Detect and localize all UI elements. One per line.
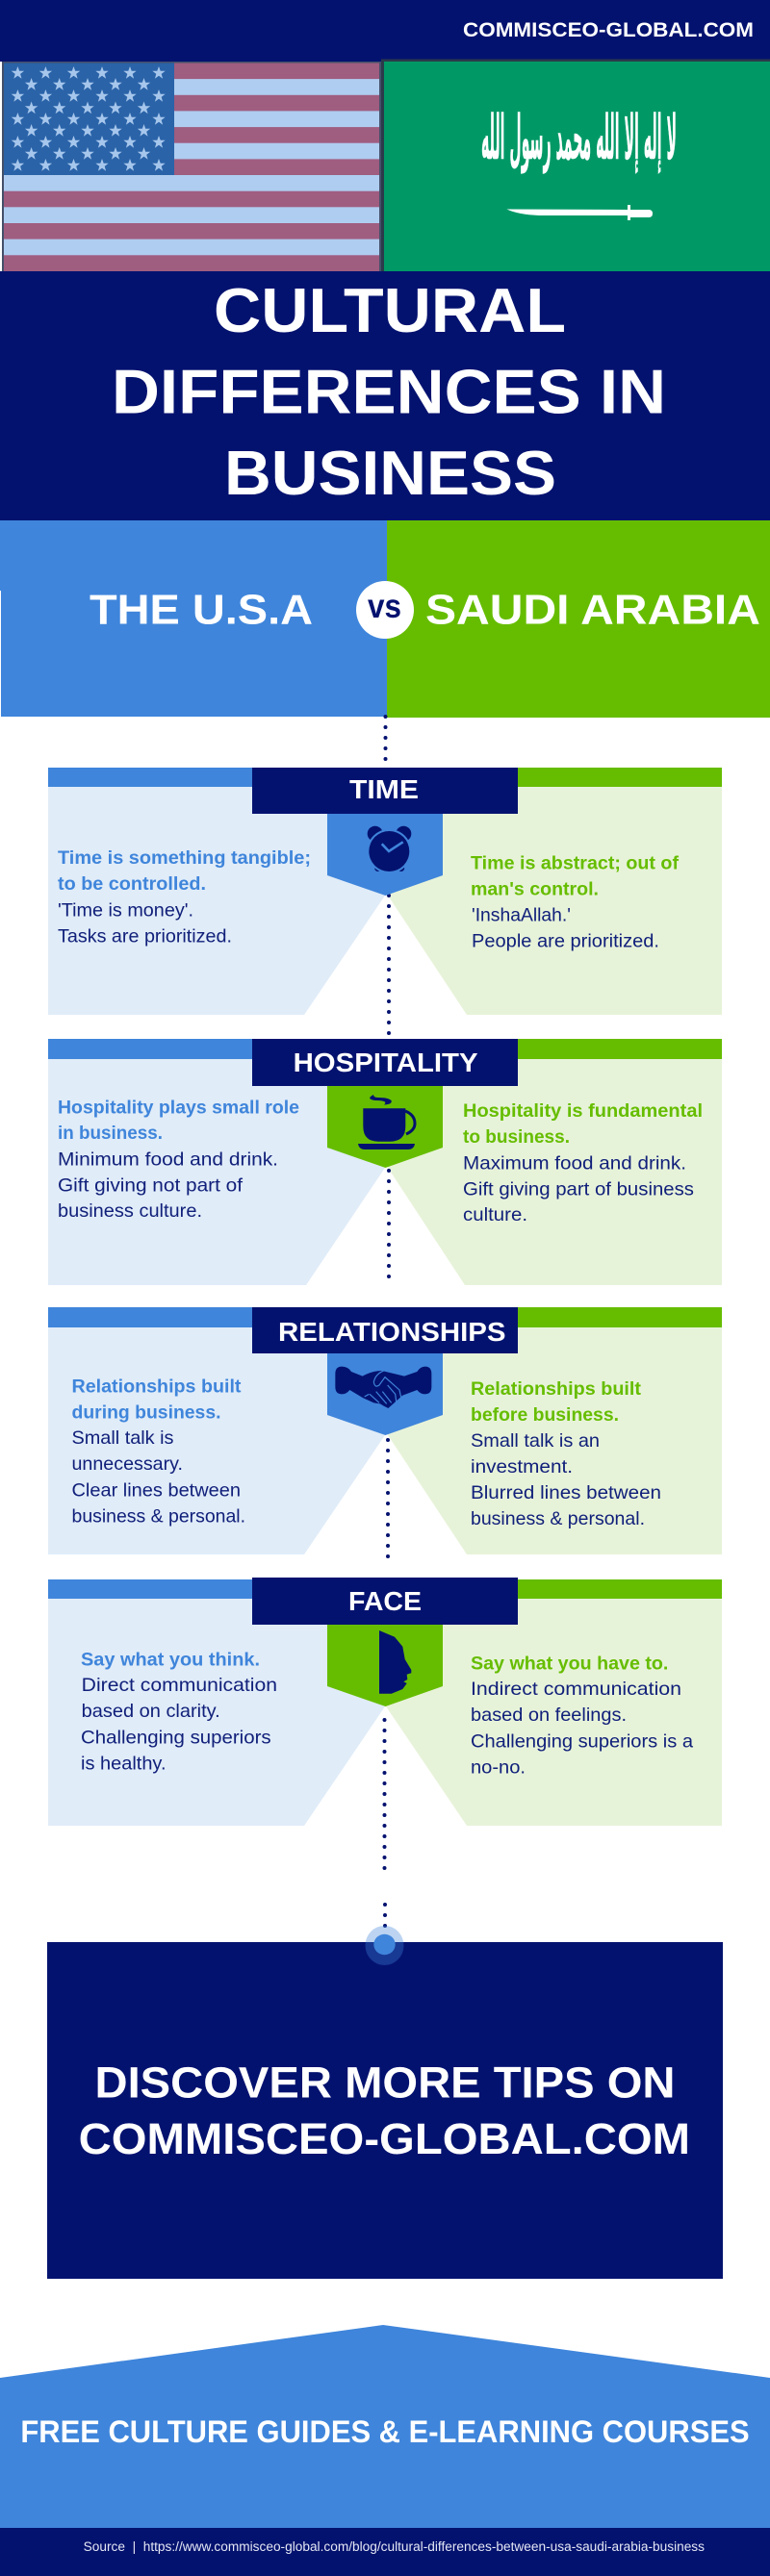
text: USA relationships: unnecessary.: [71, 1453, 183, 1475]
text: Saudi hospitality: [463, 1100, 703, 1225]
heading: HOSPITALITY: [294, 1048, 478, 1077]
text: USA face: based on clarity.: [82, 1701, 220, 1722]
heading: [252, 1039, 518, 1086]
versus band: [0, 520, 770, 718]
panel: USA: [0, 520, 387, 717]
text: Saudi hospitality: Gift giving part of business: [463, 1178, 694, 1200]
heading: [252, 768, 518, 814]
text: Saudi relationships: Small talk is an: [471, 1430, 600, 1452]
text: Saudi face: Indirect communication: [471, 1679, 681, 1700]
text: USA hospitality: in business.: [58, 1123, 163, 1144]
text: USA face: [81, 1649, 277, 1774]
text: Saudi hospitality: culture.: [463, 1204, 527, 1225]
site name: COMMISCEO-GLOBAL.COM: [463, 19, 754, 41]
text: USA hospitality: business culture.: [58, 1200, 202, 1222]
text: USA hospitality: [58, 1097, 299, 1222]
top banner: [0, 0, 770, 62]
icon: handshake: [327, 1353, 443, 1435]
flag: United States: [2, 62, 381, 272]
text: USA time: [58, 847, 311, 947]
text: Saudi hospitality: Maximum food and drink.: [463, 1152, 686, 1174]
panel: USA: THE U.S.A: [90, 587, 313, 633]
text: USA relationships: business & personal.: [71, 1505, 245, 1527]
section: hospitality: [48, 1039, 722, 1285]
text: Saudi face: no-no.: [471, 1756, 526, 1778]
right panel: [385, 1599, 722, 1826]
icon: coffee cup: [327, 1086, 443, 1168]
heading: RELATIONSHIPS: [278, 1317, 506, 1347]
text: Saudi face: [471, 1653, 693, 1778]
text: Saudi relationships: Relationships built: [471, 1378, 642, 1400]
left panel: [48, 1327, 385, 1554]
heading: [252, 1578, 518, 1625]
title: [0, 271, 770, 520]
title: CULTURAL: [214, 275, 566, 345]
title: DIFFERENCES IN: [112, 356, 666, 427]
text: USA time: Tasks are prioritized.: [58, 925, 232, 947]
text: USA face: Challenging superiors: [81, 1728, 271, 1749]
right panel: [385, 787, 722, 1015]
left panel: [48, 1059, 385, 1285]
panel: Saudi Arabia: SAUDI ARABIA: [425, 587, 760, 633]
heading: FACE: [348, 1586, 422, 1616]
panel: Saudi Arabia: [387, 520, 770, 718]
footer source: Source | https://www.commisceo-global.com/blog/cultural-differences-between-usa-saudi-arabia-business: [84, 2539, 705, 2554]
text: USA relationships: during business.: [71, 1402, 221, 1423]
heading: TIME: [349, 774, 419, 804]
footer source: [0, 2528, 770, 2576]
text: Saudi relationships: [471, 1378, 661, 1529]
banner: free guides: FREE CULTURE GUIDES & E-LEARNING COURSES: [20, 2414, 750, 2449]
call to action panel: [47, 1942, 723, 2279]
text: USA hospitality: Hospitality plays small role: [58, 1097, 299, 1118]
text: USA relationships: [71, 1376, 245, 1527]
text: USA face: Say what you think.: [81, 1649, 260, 1670]
left panel: [48, 1599, 385, 1826]
text: USA time: Time is something tangible;: [58, 847, 311, 869]
text: USA relationships: Clear lines between: [71, 1479, 241, 1501]
text: Saudi relationships: Blurred lines between: [471, 1482, 661, 1503]
text: USA time: 'Time is money'.: [58, 900, 193, 922]
icon: half face profile: [327, 1625, 443, 1706]
heading: [252, 1307, 518, 1353]
text: USA relationships: Small talk is: [71, 1427, 174, 1449]
text: USA face: is healthy.: [81, 1753, 166, 1774]
text: USA hospitality: Minimum food and drink.: [58, 1149, 278, 1171]
icon: alarm clock: [327, 814, 443, 896]
text: USA hospitality: Gift giving not part of: [58, 1175, 244, 1197]
text: USA face: Direct communication: [82, 1675, 277, 1696]
vs badge: [356, 581, 414, 639]
call to action panel: DISCOVER MORE TIPS ON: [94, 2058, 676, 2108]
text: Saudi time: man's control.: [471, 878, 599, 899]
text: Saudi relationships: investment.: [471, 1456, 573, 1477]
connector node: [366, 1926, 404, 1965]
text: Saudi face: based on feelings.: [471, 1705, 627, 1726]
text: Saudi face: Challenging superiors is a: [471, 1731, 693, 1753]
left panel: [48, 787, 385, 1015]
flag: Saudi Arabia: [381, 60, 770, 272]
section: face: [48, 1578, 722, 1872]
section: relationships: [48, 1307, 722, 1566]
text: Saudi relationships: business & personal.: [471, 1508, 645, 1529]
text: Saudi hospitality: Hospitality is fundamental: [463, 1100, 703, 1122]
text: Saudi time: [471, 852, 679, 952]
section: time: [48, 768, 722, 1034]
banner: free guides: [0, 2325, 770, 2528]
title: BUSINESS: [224, 438, 556, 508]
right panel: [385, 1327, 722, 1554]
text: Saudi relationships: before business.: [471, 1404, 619, 1426]
text: USA relationships: Relationships built: [71, 1376, 242, 1397]
text: Saudi time: Time is abstract; out of: [471, 852, 679, 873]
right panel: [385, 1059, 722, 1285]
text: USA time: to be controlled.: [58, 873, 206, 895]
call to action panel: COMMISCEO-GLOBAL.COM: [79, 2114, 690, 2163]
vs badge: vs: [368, 588, 401, 625]
text: Saudi time: 'InshaAllah.': [472, 905, 571, 926]
text: Saudi face: Say what you have to.: [471, 1653, 668, 1674]
text: Saudi time: People are prioritized.: [472, 931, 659, 952]
text: Saudi hospitality: to business.: [463, 1126, 570, 1148]
sword: [506, 205, 653, 220]
